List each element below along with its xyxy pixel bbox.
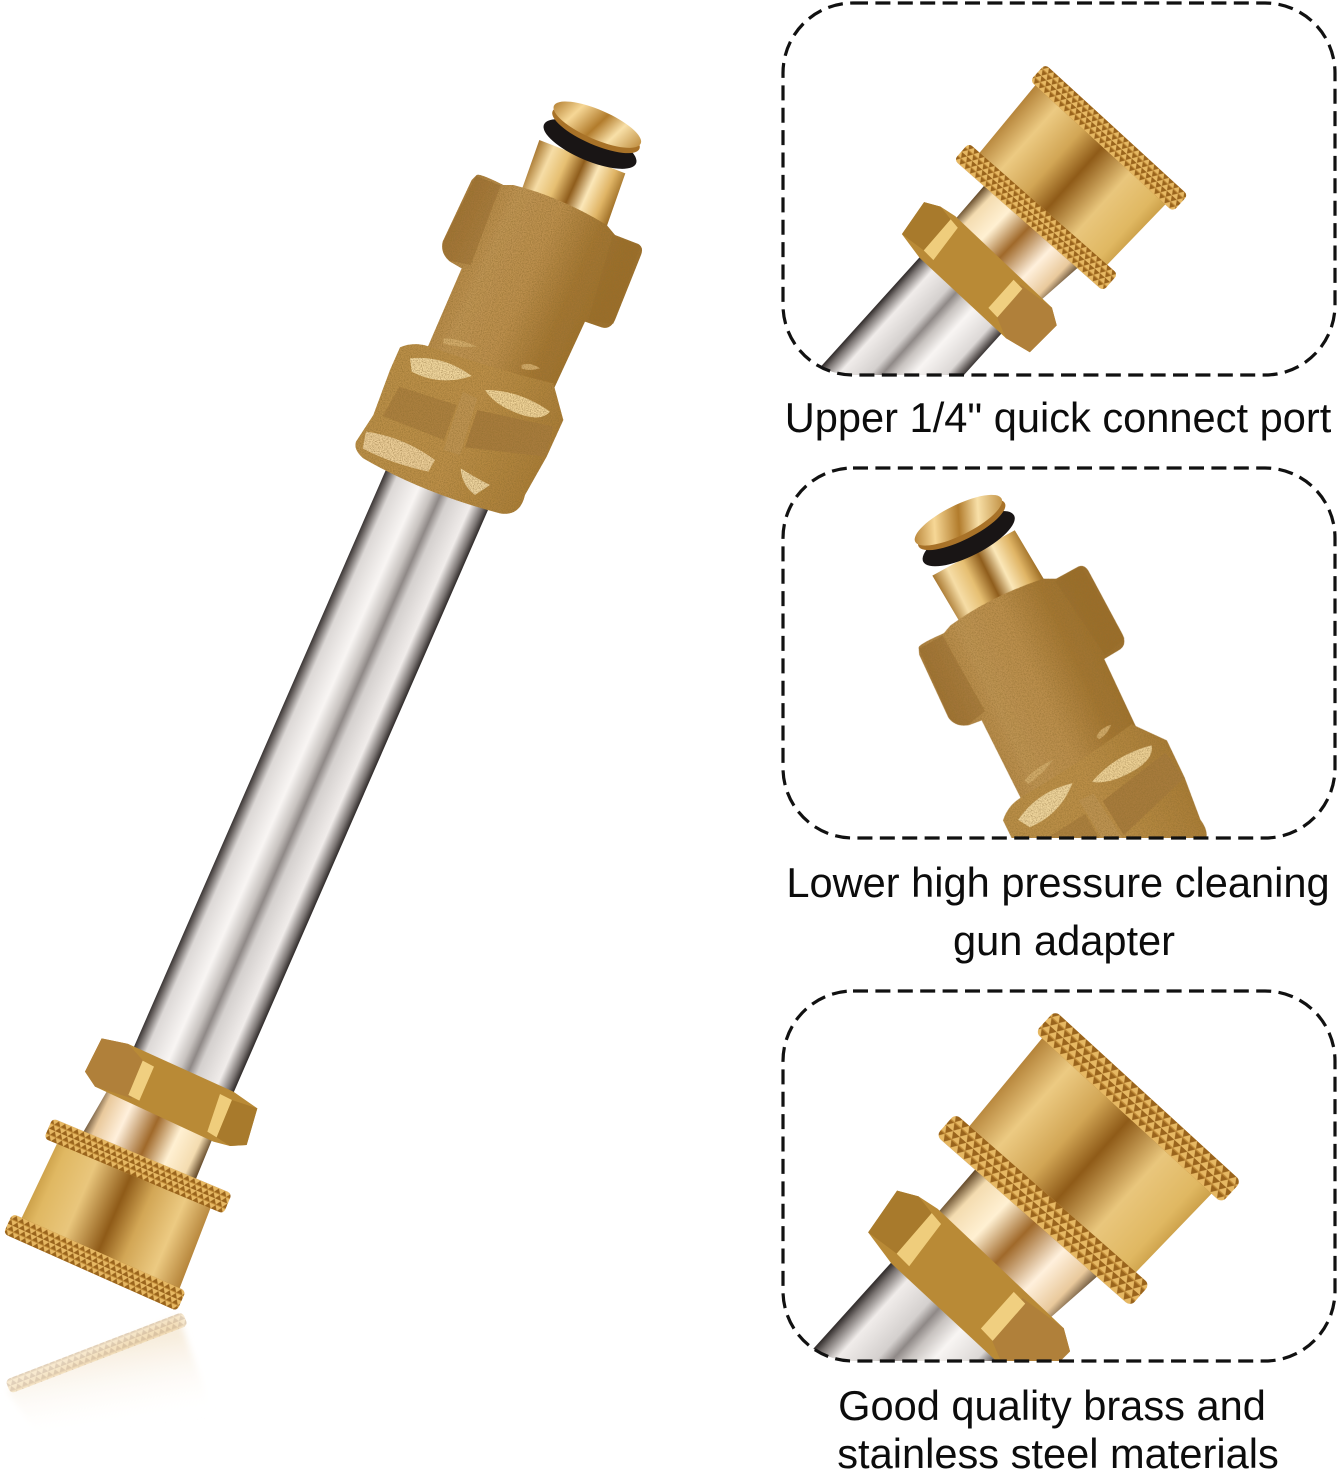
brass neck xyxy=(522,140,625,227)
black o-ring xyxy=(537,109,643,179)
outer knurled ring xyxy=(3,1214,186,1311)
sand-cast body with tabs xyxy=(425,175,642,390)
inner knurled ring xyxy=(44,1118,232,1214)
brass neck xyxy=(77,1092,213,1193)
collar with ribs xyxy=(355,344,563,514)
caption: gun adapter: gun adapter xyxy=(953,917,1175,964)
caption: gun adapter xyxy=(786,859,1330,964)
upper gun adapter (brass) xyxy=(355,92,647,514)
detail image: gun adapter xyxy=(785,466,1326,1363)
caption: gun adapter: Lower high pressure cleaning xyxy=(786,859,1330,906)
dashed frame xyxy=(783,991,1335,1361)
stainless steel tube xyxy=(126,465,488,1110)
caption: upper port: Upper 1/4" quick connect port xyxy=(785,394,1332,441)
detail image: enlarged connector xyxy=(796,989,1326,1363)
panel: materials xyxy=(781,989,1337,1363)
brass cap xyxy=(547,92,647,162)
caption: materials xyxy=(837,1385,1279,1473)
lower quick connect (brass) xyxy=(3,1038,257,1311)
hex nut xyxy=(85,1038,257,1146)
reflection under the product xyxy=(5,1312,213,1433)
panel: upper quick connect port xyxy=(781,1,1337,377)
dashed frame xyxy=(783,3,1335,375)
main product: brass and steel adapter xyxy=(3,92,647,1311)
detail image: quick connector xyxy=(786,1,1325,1363)
dashed frame xyxy=(783,468,1335,838)
panel: lower gun adapter xyxy=(781,466,1337,840)
coupler body xyxy=(21,1137,214,1292)
